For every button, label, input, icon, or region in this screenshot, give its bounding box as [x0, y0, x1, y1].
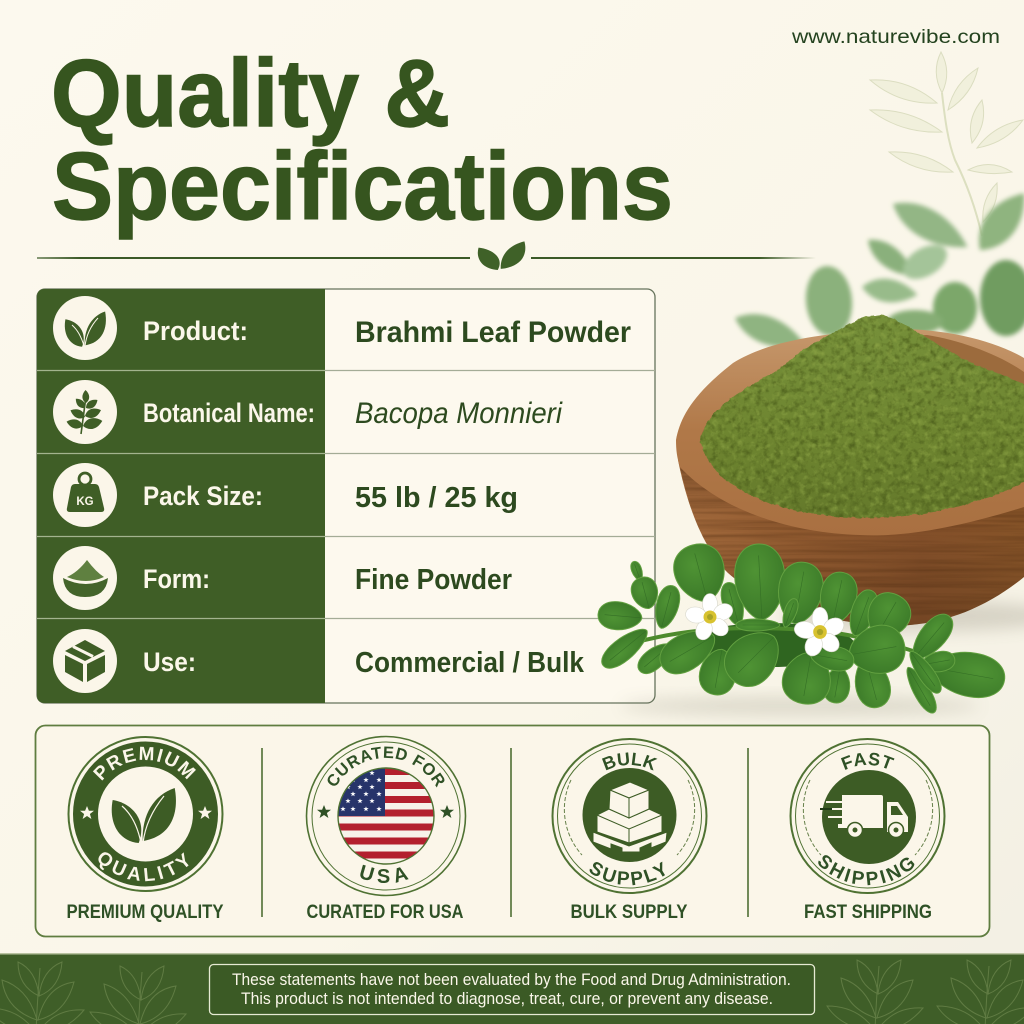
badge: curated for usa: CURATED FOR USA — [306, 902, 464, 923]
row separators — [37, 370, 655, 618]
row: botanical name: Botanical Name: — [143, 398, 315, 428]
row: use — [53, 629, 585, 693]
row: form: Form: — [143, 564, 210, 594]
badge panel — [34, 724, 990, 938]
badge: fast shipping: FAST SHIPPING — [804, 902, 932, 923]
row: pack size: Pack Size: — [143, 481, 263, 511]
american flag — [338, 768, 434, 864]
bowl shading — [680, 467, 1024, 626]
badge: fast shipping: FAST — [841, 752, 894, 770]
badge: premium quality — [66, 736, 224, 923]
disclaimer box — [210, 964, 814, 1014]
icon: delivery truck — [820, 795, 908, 838]
badge: premium quality: PREMIUM QUALITY — [66, 902, 224, 923]
row: pack size — [53, 463, 518, 527]
row: form — [53, 546, 512, 610]
row: use: Commercial / Bulk — [355, 647, 585, 679]
badge: bulk supply — [552, 738, 708, 923]
disclaimer box: This product is not intended to diagnose, treat, cure, or prevent any disease. — [241, 990, 773, 1008]
row: form: Fine Powder — [355, 564, 512, 596]
spec table — [37, 289, 655, 703]
badge: bulk supply: BULK — [602, 752, 658, 770]
badge: premium quality: PREMIUM — [92, 746, 196, 780]
badge: curated for usa: USA — [360, 864, 408, 883]
icon: line-art plant — [870, 52, 1023, 236]
badge: curated for usa: CURATED FOR — [328, 746, 444, 788]
brahmi sprig with flowers — [596, 539, 1008, 717]
row: product: Product: — [143, 316, 248, 346]
title: Specifications — [52, 133, 673, 240]
disclaimer box: These statements have not been evaluated by the Food and Drug Administration. — [232, 971, 791, 989]
badge: fast shipping — [790, 738, 946, 923]
badge: fast shipping: SHIPPING — [818, 855, 914, 886]
bowl inner wall — [700, 335, 1024, 518]
badge: bulk supply: BULK SUPPLY — [570, 902, 688, 923]
flower left — [684, 594, 735, 642]
row: pack size: KG — [76, 496, 94, 508]
blurred background leaves — [730, 184, 1024, 358]
bowl of brahmi powder — [676, 315, 1024, 632]
row: botanical name — [53, 380, 563, 444]
icon: boxes on pallet — [593, 782, 667, 852]
footer band — [0, 953, 1024, 1024]
row: product — [53, 296, 631, 360]
row: botanical name: Bacopa Monnieri — [355, 397, 563, 430]
row: product: Brahmi Leaf Powder — [355, 316, 631, 349]
row: use: Use: — [143, 647, 196, 677]
label column — [37, 289, 325, 703]
title — [51, 40, 673, 240]
badge: curated for usa — [306, 736, 466, 923]
bowl rim — [676, 329, 1024, 535]
badge: premium quality: QUALITY — [98, 852, 189, 882]
bowl body — [678, 460, 1024, 626]
row: pack size: 55 lb / 25 kg — [355, 482, 518, 514]
title: Quality & — [51, 40, 450, 147]
website url: www.naturevibe.com — [791, 26, 1000, 48]
divider with leaf — [37, 241, 816, 270]
powder mound — [700, 315, 1024, 518]
badge: bulk supply: SUPPLY — [590, 862, 665, 886]
flower right — [793, 607, 847, 658]
